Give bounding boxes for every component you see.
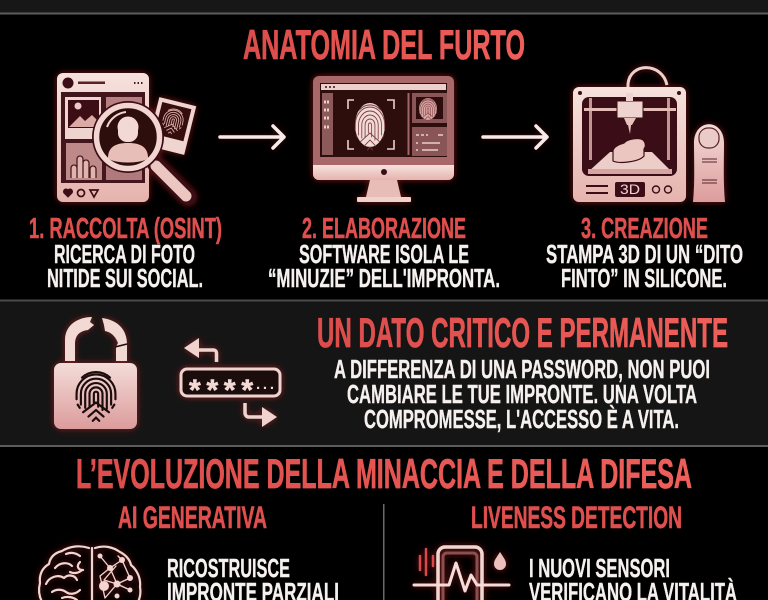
step 2 caption xyxy=(268,213,500,293)
icon: social profile with magnifier xyxy=(57,73,196,202)
step 1 caption xyxy=(29,213,222,293)
icon: 3D printer and silicone finger xyxy=(573,68,725,202)
text block: liveness description: I NUOVI SENSORI xyxy=(529,553,670,583)
step 2 caption: SOFTWARE ISOLA LE xyxy=(299,239,469,269)
title: anatomia del furto: ANATOMIA DEL FURTO xyxy=(243,21,525,68)
icon: brain half neural network xyxy=(39,546,140,600)
icon: password field with swap arrows xyxy=(181,338,280,427)
step 1 caption: RICERCA DI FOTO xyxy=(54,239,195,269)
icon: monitor with fingerprint xyxy=(313,76,454,202)
icon: password field with swap arrows: **** xyxy=(189,374,253,407)
text block: critical data description xyxy=(334,354,710,434)
icon: 3D printer and silicone finger: 3D xyxy=(620,181,640,197)
arrow: step 2 to 3 xyxy=(483,126,547,148)
heading: generative AI: AI GENERATIVA xyxy=(118,499,267,535)
arrow: step 1 to 2 xyxy=(220,126,284,148)
text block: generative AI description: RICOSTRUISCE xyxy=(167,553,290,583)
text block: liveness description xyxy=(529,553,737,600)
step 2 caption: “MINUZIE” DELL'IMPRONTA. xyxy=(268,263,500,293)
step 3 caption xyxy=(546,213,743,293)
icon: broken padlock with fingerprint xyxy=(54,317,137,429)
step 1 caption: 1. RACCOLTA (OSINT) xyxy=(29,213,222,245)
top strip xyxy=(0,0,768,13)
text block: generative AI description xyxy=(167,553,339,600)
icon: liveness sensor with pulse xyxy=(414,547,509,600)
step 1 caption: NITIDE SUI SOCIAL. xyxy=(47,263,203,293)
icon: password field with swap arrows: ... xyxy=(256,376,274,393)
panel: critical data band xyxy=(0,300,768,447)
step 2 caption: 2. ELABORAZIONE xyxy=(302,213,466,245)
